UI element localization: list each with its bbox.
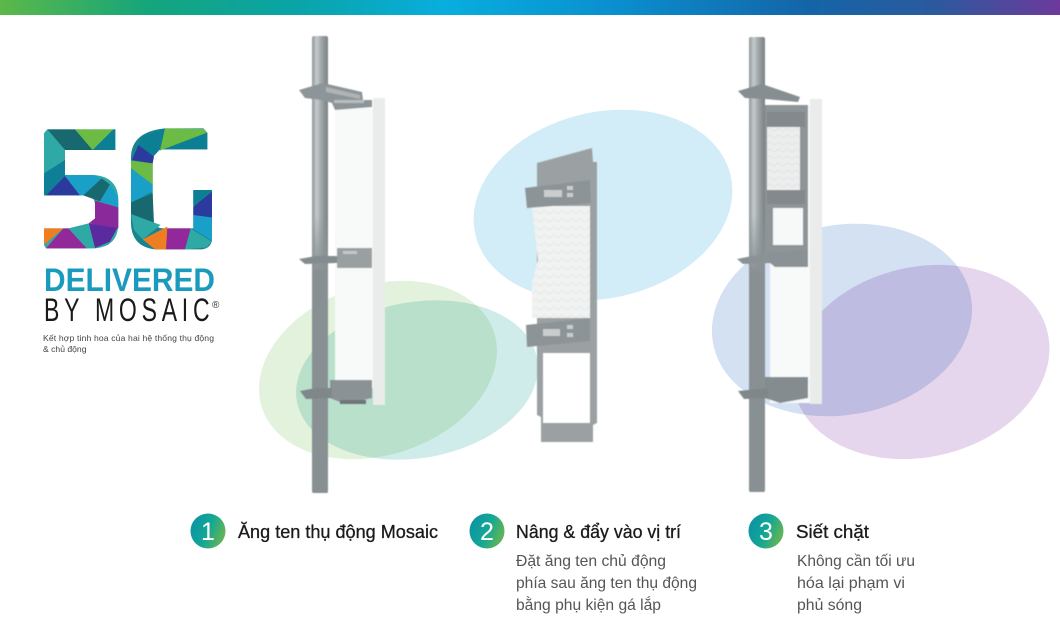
logo text: BY MOSAIC: BY MOSAIC (44, 292, 210, 328)
step 2 (470, 514, 697, 614)
step 3 description: phủ sóng (797, 597, 862, 614)
step 1 (190, 514, 438, 548)
step 2 description: phía sau ăng ten thụ động (516, 575, 697, 592)
white window (773, 208, 803, 245)
logo: 5G Delivered by Mosaic (43, 128, 220, 354)
registered mark: ® (212, 300, 220, 311)
step 2 description: bằng phụ kiện gá lắp (516, 595, 661, 614)
middle clamp (737, 250, 808, 267)
logo caption: Kết hợp tinh hoa của hai hệ thống thụ động (43, 333, 214, 343)
background blobs: step 3 (696, 204, 1060, 484)
top clamp (738, 84, 800, 102)
panel (335, 108, 373, 388)
step 1 badge (190, 514, 226, 548)
step 2 description: Đặt ăng ten chủ động (516, 553, 666, 570)
active frame (765, 105, 808, 263)
background blob: step 2 (454, 85, 752, 325)
logo text: DELIVERED: DELIVERED (44, 262, 215, 298)
step 2 badge: 2 (480, 518, 494, 546)
step 3 badge: 3 (759, 518, 773, 546)
step 3 description: Không cần tối ưu (797, 553, 915, 570)
back frame (537, 148, 597, 442)
step 3 heading: Siết chặt (796, 522, 869, 542)
top clamp (299, 83, 372, 110)
lower bracket (765, 377, 808, 403)
step 2 badge (470, 514, 504, 548)
step 3 (748, 514, 915, 614)
step 3 description: hóa lại phạm vi (797, 575, 905, 592)
pole (749, 37, 765, 492)
step 2 heading: Nâng & đẩy vào vị trí (516, 522, 681, 542)
step 1 badge: 1 (201, 518, 215, 546)
step 3 badge (748, 514, 784, 548)
active module brackets (767, 112, 805, 127)
logo mark: 5G mosaic (44, 128, 212, 249)
active module (767, 127, 800, 190)
top gradient bar (0, 0, 1060, 15)
antenna 2: active antenna with mounting frame (525, 148, 597, 442)
background blobs: step 1 (236, 251, 551, 489)
bottom bracket (526, 318, 590, 347)
passive panel (770, 105, 810, 403)
logo caption: & chủ động (43, 344, 87, 354)
antenna 1: passive antenna on pole (299, 36, 385, 493)
antenna 3: assembled active and passive antenna (737, 37, 822, 492)
bottom bracket (330, 380, 372, 404)
radiator module (532, 206, 590, 318)
pole (312, 36, 328, 493)
step 1 heading: Ăng ten thụ động Mosaic (238, 522, 438, 542)
top bracket (525, 180, 591, 208)
middle bracket (337, 248, 372, 268)
